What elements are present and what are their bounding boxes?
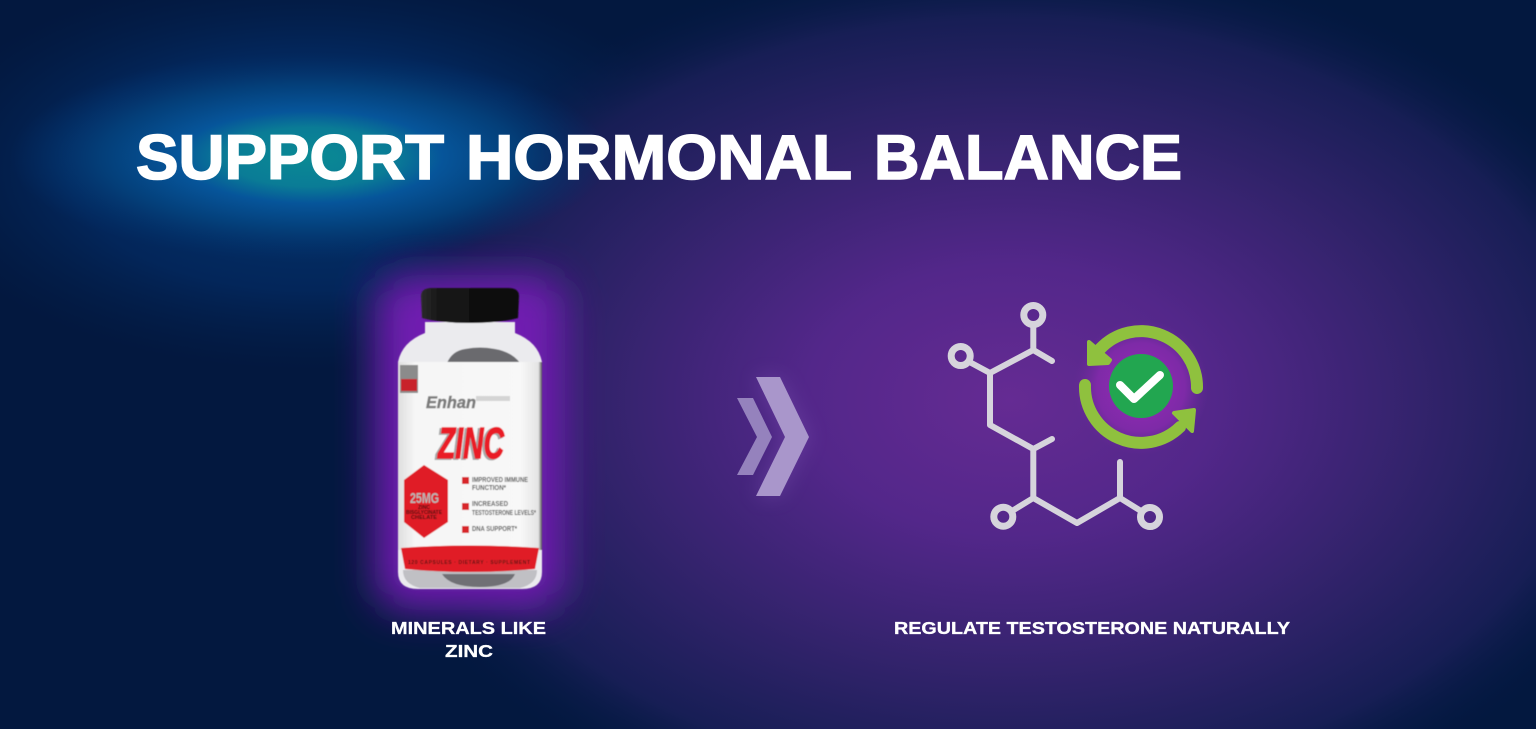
side badge <box>400 365 418 393</box>
capsules at top <box>447 348 520 363</box>
label: minerals like zinc <box>391 618 546 661</box>
title: HORMONAL <box>466 123 852 193</box>
product name: ZINC <box>437 419 505 468</box>
label: regulate testosterone naturally: REGULATE TESTOSTERONE NATURALLY <box>894 618 1290 638</box>
check circle <box>1109 354 1173 418</box>
bottle cap <box>421 288 519 323</box>
benefits list: INCREASED <box>472 501 508 508</box>
label <box>398 362 542 550</box>
product bottle: zinc supplement: 120 CAPSULES · DIETARY · SUPPLEMENT <box>408 560 530 566</box>
cycle arrows <box>1085 331 1197 443</box>
glass jar <box>398 322 542 589</box>
benefits list: TESTOSTERONE LEVELS* <box>472 510 536 517</box>
icon: green cycle with check <box>1073 319 1209 455</box>
benefits list: IMPROVED IMMUNE <box>472 477 528 484</box>
large chevron <box>756 377 809 496</box>
benefits list <box>462 477 536 533</box>
benefits list: FUNCTION* <box>472 485 506 492</box>
red band <box>401 546 539 572</box>
dosage hexagon <box>404 465 448 538</box>
title: SUPPORT <box>136 123 444 193</box>
icon: molecule <box>951 306 1160 526</box>
product name: ZINC <box>435 420 503 469</box>
product bottle: zinc supplement <box>398 288 542 589</box>
label: minerals like zinc: ZINC <box>445 641 493 661</box>
capsules at bottom <box>403 570 537 588</box>
benefits list: DNA SUPPORT* <box>472 526 517 533</box>
title <box>136 123 1182 193</box>
product name <box>435 419 505 469</box>
title: BALANCE <box>874 123 1182 193</box>
dosage hexagon: CHELATE <box>411 515 438 521</box>
arrow: double chevron <box>737 377 809 496</box>
dosage hexagon: BISGLYCINATE <box>406 510 443 516</box>
dosage hexagon: 25MG <box>410 490 439 507</box>
label: minerals like zinc: MINERALS LIKE <box>391 618 546 638</box>
dosage hexagon: ZINC <box>418 505 430 511</box>
brand name: Enhan <box>426 393 476 412</box>
small chevron <box>737 398 772 475</box>
